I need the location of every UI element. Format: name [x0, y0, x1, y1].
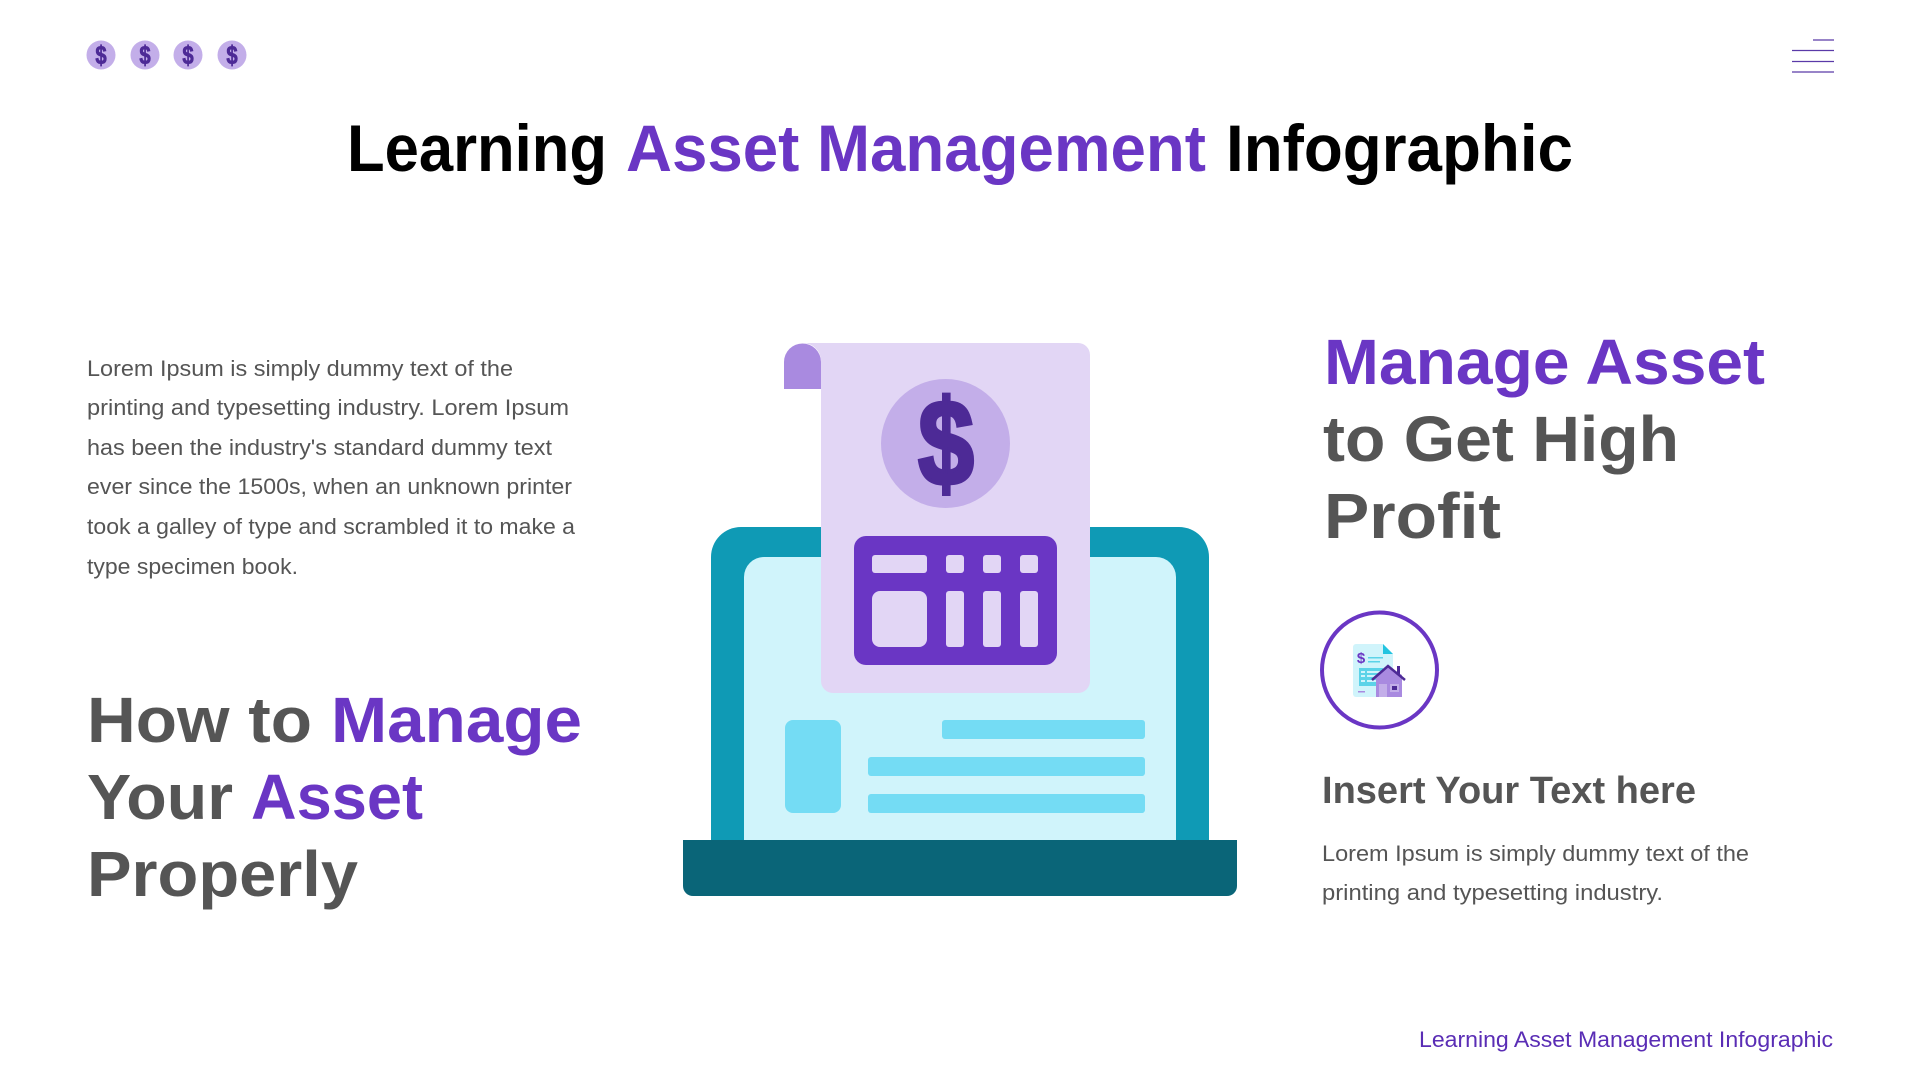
dollar coin: $ — [918, 375, 974, 511]
heading: how to manage your asset properly — [87, 684, 582, 910]
title — [347, 111, 1573, 185]
screen content lines — [868, 720, 1145, 813]
footer label: Learning Asset Management Infographic — [1419, 1027, 1833, 1052]
subheading: Insert Your Text here — [1322, 770, 1696, 812]
heading: manage asset to get high profit: Profit — [1324, 480, 1501, 552]
heading: how to manage your asset properly: Manage — [331, 684, 582, 756]
text block: intro paragraph: printing and typesetting industry. Lorem Ipsum — [87, 395, 569, 420]
laptop base — [683, 840, 1237, 896]
title: Asset Management — [626, 111, 1206, 185]
icon: document and house in circle — [1322, 612, 1437, 728]
laptop body — [711, 527, 1209, 840]
dollar coin — [881, 375, 1010, 511]
heading: how to manage your asset properly: Asset — [251, 761, 423, 833]
heading: manage asset to get high profit: Manage Asset — [1324, 326, 1765, 398]
icon: menu lines — [1792, 40, 1834, 72]
icon row: dollar coins: $ — [182, 41, 194, 70]
text block: intro paragraph: Lorem Ipsum is simply dummy text of the — [87, 356, 513, 381]
title: Learning — [347, 111, 607, 185]
screen content block — [785, 720, 841, 813]
heading: manage asset to get high profit — [1323, 326, 1765, 552]
text block: description: printing and typesetting industry. — [1322, 880, 1663, 905]
icon row: dollar coins: $ — [139, 41, 151, 70]
illustration: laptop with invoice — [683, 343, 1237, 896]
icon row: dollar coins: $ — [226, 41, 238, 70]
icon row: dollar coins: $ — [95, 41, 107, 70]
text block: description — [1322, 841, 1749, 905]
heading: how to manage your asset properly: Properly — [87, 838, 358, 910]
paper sheet — [803, 343, 1090, 693]
table block — [854, 536, 1057, 665]
text block: intro paragraph: ever since the 1500s, when an unknown printer — [87, 474, 573, 499]
text block: intro paragraph: took a galley of type and scrambled it to make a — [87, 514, 575, 539]
icon: document and house in circle: $ — [1357, 650, 1366, 667]
text block: intro paragraph: has been the industry's standard dummy text — [87, 435, 553, 460]
text block: description: Lorem Ipsum is simply dummy text of the — [1322, 841, 1749, 866]
text block: intro paragraph: type specimen book. — [87, 554, 298, 579]
title: Infographic — [1226, 111, 1573, 185]
paper tab — [784, 344, 821, 389]
heading: manage asset to get high profit: to Get High — [1323, 403, 1679, 475]
laptop screen — [744, 557, 1176, 840]
text block: intro paragraph — [87, 356, 575, 579]
heading: how to manage your asset properly: How to — [87, 684, 312, 756]
heading: how to manage your asset properly: Your — [87, 761, 233, 833]
icon row: dollar coins — [86, 40, 246, 70]
